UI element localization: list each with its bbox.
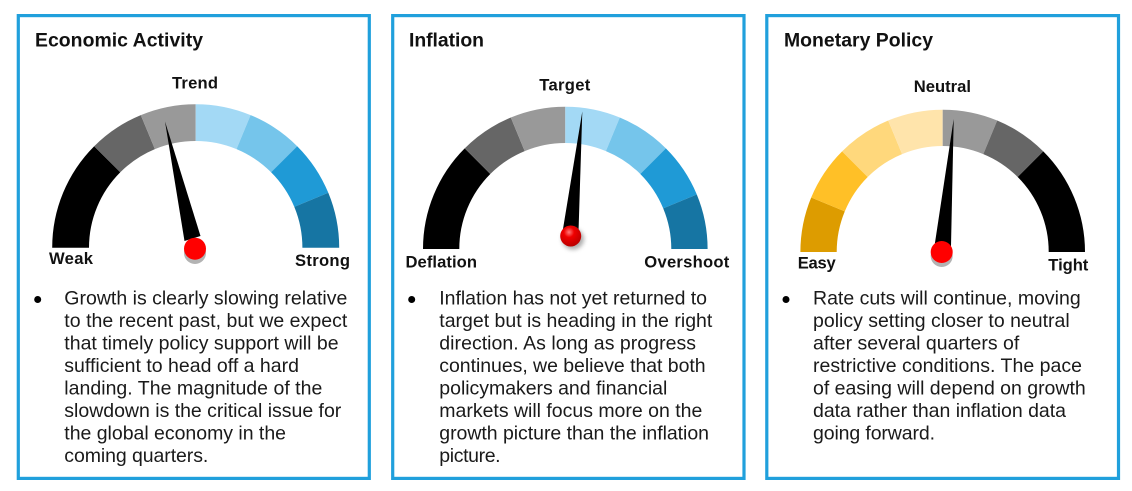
title: economic activity: Economic Activity [35,30,203,52]
text block: monetary policy commentary: of easing will depend on growth [813,378,1086,400]
text block: monetary policy commentary: restrictive conditions. The pace [813,355,1082,377]
text block: economic activity commentary [34,288,348,467]
title: inflation: Inflation [409,30,484,52]
text block: economic activity commentary: the global economy in the [64,423,286,445]
text block: economic activity commentary: coming quarters. [64,445,208,467]
text block: monetary policy commentary: data rather than inflation data [813,400,1066,422]
panel: inflation [393,16,744,478]
panel: economic activity [18,16,369,478]
label: deflation: Deflation [406,252,477,271]
label: strong: Strong [295,251,350,270]
text block: monetary policy commentary [782,288,1086,445]
label: target: Target [539,76,591,94]
panel: monetary policy [767,16,1118,478]
gauge: monetary policy [798,77,1089,274]
text block: economic activity commentary: sufficient to head off a hard [64,355,299,377]
text block: inflation commentary: policymakers and financial [439,378,667,400]
text block: inflation commentary: markets will focus more on the [439,400,702,422]
text block: inflation commentary: growth picture than the inflation [439,423,709,445]
text block: economic activity commentary: slowdown is the critical issue for [64,400,342,422]
text block: monetary policy commentary: going forward. [813,423,935,445]
title: monetary policy: Monetary Policy [784,30,933,52]
label: trend: Trend [172,74,218,92]
text block: economic activity commentary: that timely policy support will be [64,333,339,355]
text block: inflation commentary [408,288,713,467]
text block: monetary policy commentary: after several quarters of [813,333,1020,355]
text block: inflation commentary: continues, we believe that both [439,355,706,377]
needle [931,119,954,267]
gauge arc segments [52,104,339,248]
text block: monetary policy commentary: policy setting closer to neutral [813,310,1070,332]
label: tight: Tight [1048,256,1089,274]
gauge arc segments [423,107,708,249]
needle [560,112,584,250]
text block: economic activity commentary: Growth is clearly slowing relative [64,288,347,310]
text block: inflation commentary: picture. [439,445,501,467]
text block: economic activity commentary: landing. The magnitude of the [64,378,322,400]
text block: inflation commentary: target but is heading in the right [439,310,713,332]
text block: inflation commentary: direction. As long as progress [439,333,696,355]
text block: monetary policy commentary: Rate cuts will continue, moving [813,288,1081,310]
label: easy: Easy [798,254,836,272]
gauge: inflation [406,76,730,271]
label: overshoot: Overshoot [644,252,730,271]
text block: economic activity commentary: to the recent past, but we expect [64,310,348,332]
gauge: economic activity [49,74,350,270]
label: weak: Weak [49,249,94,268]
label: neutral: Neutral [914,77,971,96]
gauge arc segments [800,110,1085,252]
needle [165,122,206,264]
text block: inflation commentary: Inflation has not yet returned to [439,288,707,310]
